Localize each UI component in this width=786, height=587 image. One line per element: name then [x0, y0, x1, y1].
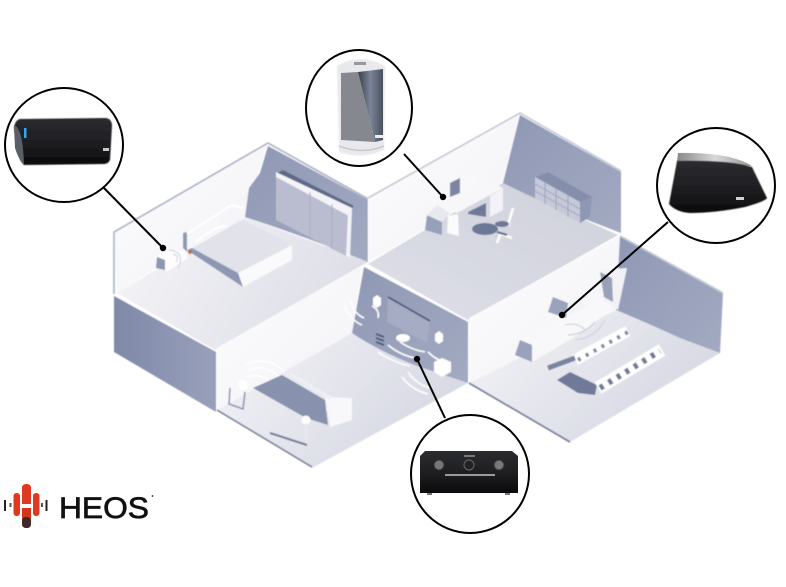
- media room floor: [469, 310, 720, 442]
- seating rows: [548, 331, 662, 388]
- wordmark: HEOS: [59, 492, 149, 525]
- sound waves: living room: [246, 300, 445, 418]
- living room floor: [217, 333, 468, 468]
- silver top: [677, 153, 752, 166]
- sideboard: [515, 268, 627, 362]
- media room front edge: [469, 383, 570, 442]
- room: office: [368, 113, 621, 320]
- living room front edge: [217, 410, 312, 467]
- bookshelf: [535, 172, 592, 223]
- bedroom wall rim: [114, 143, 368, 294]
- living room back wall: [352, 267, 468, 383]
- office right wall: [503, 115, 621, 233]
- trademark dot: [152, 495, 153, 497]
- callout: bar speaker: [5, 88, 123, 202]
- blue wall below bedroom: [114, 296, 216, 412]
- sofa: [253, 374, 352, 427]
- office left wall: [368, 114, 520, 262]
- bedroom back wall: [245, 146, 368, 262]
- room: media room: [469, 236, 723, 442]
- connector: receiver: [414, 356, 445, 418]
- grille right: [358, 69, 383, 142]
- speaker body: [14, 118, 112, 165]
- office floor: [368, 183, 618, 320]
- media room rim: [620, 236, 723, 293]
- speaker body: [669, 161, 767, 213]
- office chair: [472, 208, 513, 243]
- callout: tower speaker: [306, 50, 412, 166]
- floor lamp speaker: [270, 416, 310, 445]
- logo mark: [4, 484, 48, 528]
- screen table: [557, 372, 597, 395]
- nightstand speaker: [156, 250, 188, 272]
- media room left wall: [469, 236, 620, 383]
- office wall rim: [368, 113, 621, 198]
- connector: media room speaker: [559, 222, 668, 318]
- television: [387, 297, 430, 343]
- room: living room: [217, 265, 468, 468]
- callout: AV receiver: [411, 415, 529, 533]
- connector: bedroom speaker: [103, 187, 166, 251]
- equipment stack: [376, 334, 384, 345]
- cabinet: [425, 205, 450, 235]
- logo: HEOS: [4, 484, 153, 528]
- desk: [437, 175, 503, 236]
- room: bedroom: [114, 143, 368, 350]
- callout: wide speaker: [657, 128, 775, 243]
- connector: office speaker: [404, 154, 446, 200]
- wall speakers: [373, 295, 451, 377]
- bedroom floor: [117, 217, 368, 350]
- media room right wall: [616, 236, 723, 353]
- living room left wall: [217, 265, 363, 410]
- wardrobe: [276, 170, 354, 258]
- bed: [183, 205, 292, 287]
- grille left: [341, 72, 375, 142]
- floor speaker left: [229, 380, 248, 409]
- bedroom left wall: [114, 143, 268, 293]
- receiver body: [420, 451, 518, 493]
- speaker body: [337, 59, 385, 156]
